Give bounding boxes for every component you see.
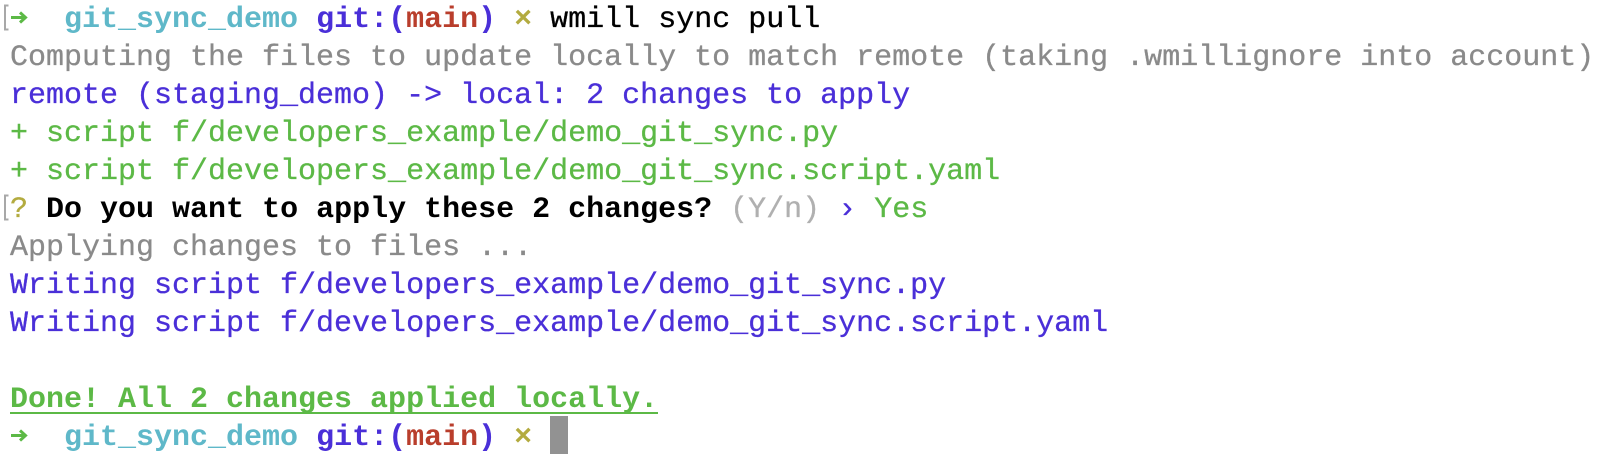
done message with underline: Done! All 2 changes applied locally. <box>10 383 658 417</box>
confirmation prompt: ? Do you want to apply these 2 changes? (Y/n) › Yes <box>10 193 928 227</box>
prompt line with wmill sync pull command: git_sync_demo git:(main) × wmill sync pull <box>64 3 820 37</box>
icon: green prompt arrow <box>11 430 28 442</box>
writing file two: Writing script f/developers_example/demo_git_sync.script.yaml <box>10 307 1108 341</box>
terminal cursor <box>550 416 568 454</box>
added file two: + script f/developers_example/demo_git_sync.script.yaml <box>10 155 1000 189</box>
writing file one: Writing script f/developers_example/demo_git_sync.py <box>10 269 946 303</box>
added file one: + script f/developers_example/demo_git_sync.py <box>10 117 838 151</box>
status: applying changes: Applying changes to files ... <box>10 231 532 265</box>
selection bracket, first prompt <box>4 4 8 30</box>
selection bracket, confirmation prompt <box>4 194 8 220</box>
remote to local summary: remote (staging_demo) -> local: 2 changes to apply <box>10 79 910 113</box>
final prompt line: git_sync_demo git:(main) × <box>64 421 532 455</box>
icon: green prompt arrow <box>11 12 28 24</box>
status: computing files: Computing the files to update locally to match remote (taking .wmillignore into account) <box>10 41 1594 75</box>
